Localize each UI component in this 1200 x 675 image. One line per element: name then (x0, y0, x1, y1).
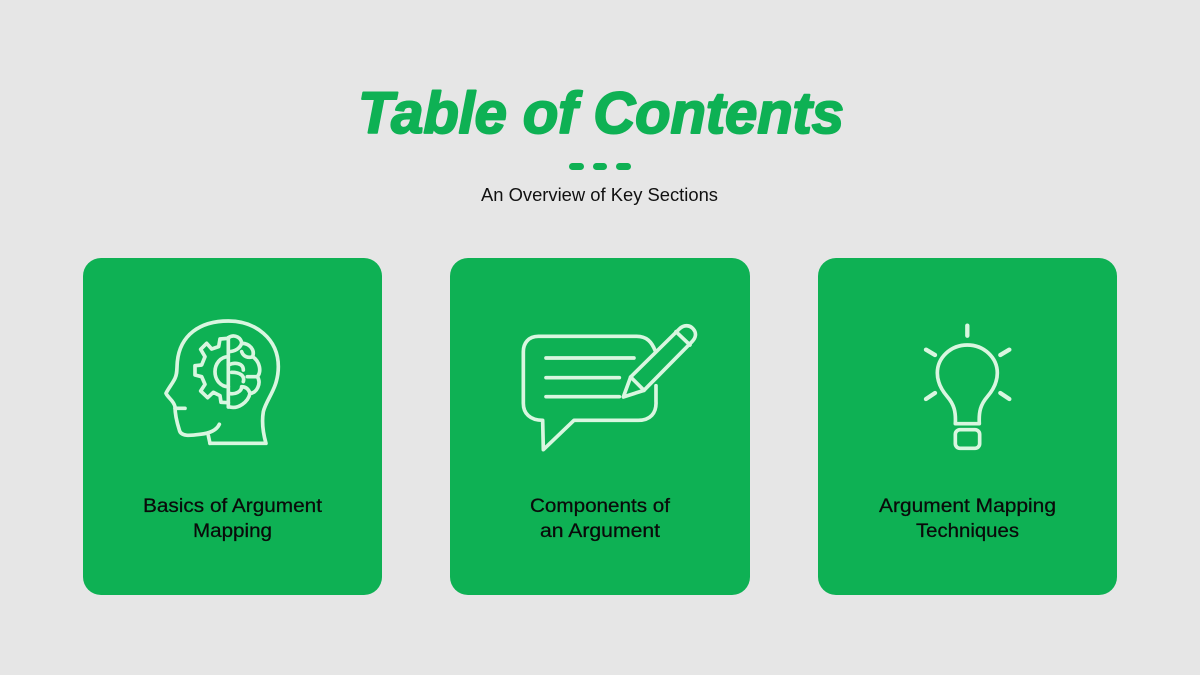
icon: head with gear and brain (166, 321, 278, 443)
panel: basics of argument mapping: Mapping (193, 521, 272, 542)
panel: argument mapping techniques: Techniques (916, 521, 1019, 542)
label: Basics of Argument (143, 496, 323, 517)
icon: speech bubble with pencil (523, 326, 695, 450)
subtitle: An Overview of Key Sections (481, 185, 718, 205)
title dashes (569, 163, 631, 170)
label: Components of (530, 496, 671, 517)
label: Argument Mapping (879, 496, 1056, 517)
icon: light bulb (926, 326, 1009, 448)
panel: argument mapping techniques (818, 258, 1117, 595)
title: Table of Contents (358, 81, 844, 146)
panel: components of an argument (450, 258, 750, 595)
panel: components of an argument: an Argument (540, 521, 661, 542)
panel: basics of argument mapping (83, 258, 382, 595)
